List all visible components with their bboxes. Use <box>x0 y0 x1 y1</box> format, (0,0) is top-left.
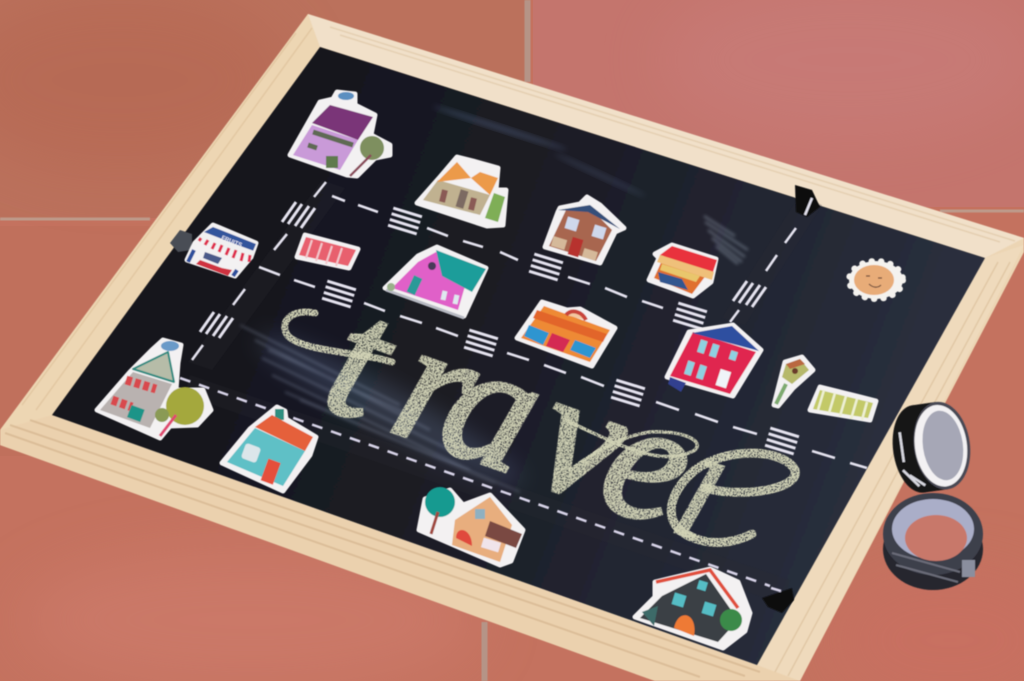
sticker: grey house with tree <box>97 340 211 438</box>
crosswalk: upper 1 <box>388 208 422 234</box>
black tape ends <box>170 185 820 613</box>
crosswalk: upper 3 <box>673 303 707 329</box>
washi tape rolls <box>883 398 983 590</box>
frame: left rail <box>0 14 320 430</box>
word: e <box>581 355 719 564</box>
bottom road dashed line <box>180 378 770 586</box>
frame: bottom rail <box>0 415 800 681</box>
tape roll: flat <box>883 493 983 590</box>
frame: top rail <box>308 14 1024 258</box>
lower road dashes <box>259 267 867 468</box>
right vertical road dashes <box>730 228 796 322</box>
left vertical road dashes <box>192 182 326 360</box>
chalk lettering: travel <box>285 258 795 576</box>
crosswalk: lower 1 <box>322 281 356 307</box>
sticker: brick house <box>545 197 624 263</box>
sticker: yellow fence <box>810 387 876 420</box>
sticker: red house <box>667 325 761 396</box>
sticker: smiling sun <box>849 261 903 299</box>
word: t <box>305 258 420 459</box>
sticker: orange roof house <box>417 157 506 226</box>
sticker: birdhouse <box>774 357 813 406</box>
frame: right rail <box>757 245 1024 681</box>
crosswalk: lower 3 <box>611 380 645 406</box>
crosswalk: lower 2 <box>464 330 498 356</box>
word: a <box>420 299 568 511</box>
crosswalk: right road <box>733 281 766 307</box>
chalk smears <box>240 104 748 500</box>
tape roll: upright <box>887 398 976 496</box>
sticker: orange diner <box>517 302 615 366</box>
crosswalk: left road 2 <box>200 312 233 338</box>
crosswalk: upper 2 <box>529 254 563 280</box>
sticker: fruits shop <box>187 225 256 276</box>
sticker: pink and teal house <box>385 247 486 318</box>
road markings <box>180 182 867 586</box>
sticker: dark house with red roof <box>635 569 750 648</box>
word: r <box>373 282 503 488</box>
sticker: purple house with tree <box>290 92 390 176</box>
sticker: red and orange market stall <box>649 245 717 296</box>
stickers <box>97 92 903 648</box>
crosswalk: left road 1 <box>282 202 315 228</box>
word: l <box>663 437 732 563</box>
word: v <box>515 332 653 541</box>
sticker: fruits shop: FRUITS <box>220 235 243 249</box>
chalk flourish strokes <box>285 312 795 542</box>
road tape bands <box>185 180 822 605</box>
sticker: peach house with tree <box>419 487 523 565</box>
sticker: pink fence <box>297 235 358 268</box>
upper road dashes <box>332 196 663 308</box>
crosswalk: lower 4 <box>765 428 799 454</box>
sticker: teal house with red roof <box>222 407 316 491</box>
